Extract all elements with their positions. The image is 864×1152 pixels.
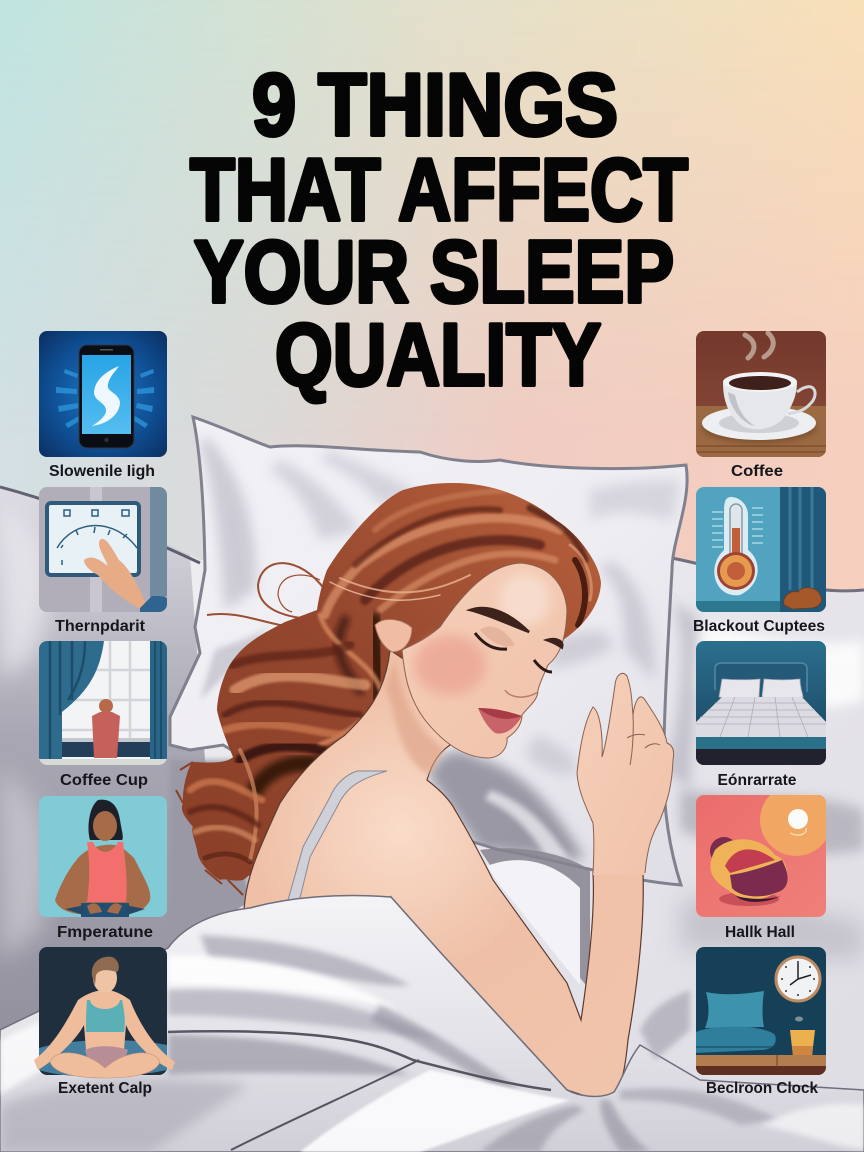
title: 9 THINGS	[252, 55, 618, 154]
neck shading	[385, 660, 445, 775]
wave strands	[320, 615, 382, 745]
stray hair loops	[207, 563, 325, 628]
title: THAT AFFECT	[190, 140, 688, 239]
pillow	[170, 417, 687, 990]
label: Thernpdarit	[55, 618, 145, 635]
icon: coffee	[696, 331, 826, 457]
title	[190, 55, 688, 404]
icon: woman standing	[39, 796, 167, 917]
background gradient	[0, 0, 864, 620]
title: QUALITY	[275, 305, 601, 404]
icon: bed	[696, 641, 826, 765]
shadow near ear	[374, 620, 379, 700]
duvet	[0, 895, 864, 1152]
duvet folds	[200, 935, 410, 986]
title: YOUR SLEEP	[194, 222, 674, 321]
icon: phone	[39, 331, 167, 457]
icon: bedroom clock	[696, 947, 826, 1075]
label: Fmperatune	[57, 924, 153, 941]
lips	[478, 708, 522, 734]
hair mass	[176, 483, 601, 895]
label: Coffee Cup	[60, 772, 148, 789]
label: Coffee	[731, 463, 783, 480]
icon: thermometer and curtain	[696, 487, 826, 612]
ear	[375, 619, 412, 652]
neck, back and upper arm	[244, 650, 643, 1097]
icon: thermostat	[39, 487, 167, 612]
hand	[577, 673, 674, 875]
nose	[505, 690, 538, 697]
icon: meditation	[34, 947, 175, 1078]
eyelid shade	[480, 626, 515, 647]
bedding background	[0, 487, 864, 1152]
sleeping woman	[176, 483, 674, 1097]
label: Exetent Calp	[58, 1080, 152, 1097]
face	[402, 563, 567, 758]
hand details	[577, 673, 674, 873]
closed eyes	[475, 633, 552, 672]
label: Hallk Hall	[725, 924, 795, 941]
crown strands	[325, 518, 560, 615]
label: Slowenile Iigh	[49, 463, 155, 480]
label: Blackout Cuptees	[693, 618, 825, 635]
icon: coral abstract	[696, 795, 826, 917]
label: Beclroon Clock	[706, 1080, 818, 1097]
label: Eónrarrate	[718, 772, 797, 789]
top strap	[288, 771, 387, 900]
eyebrows	[470, 608, 529, 632]
icon: window with curtains	[39, 641, 167, 765]
